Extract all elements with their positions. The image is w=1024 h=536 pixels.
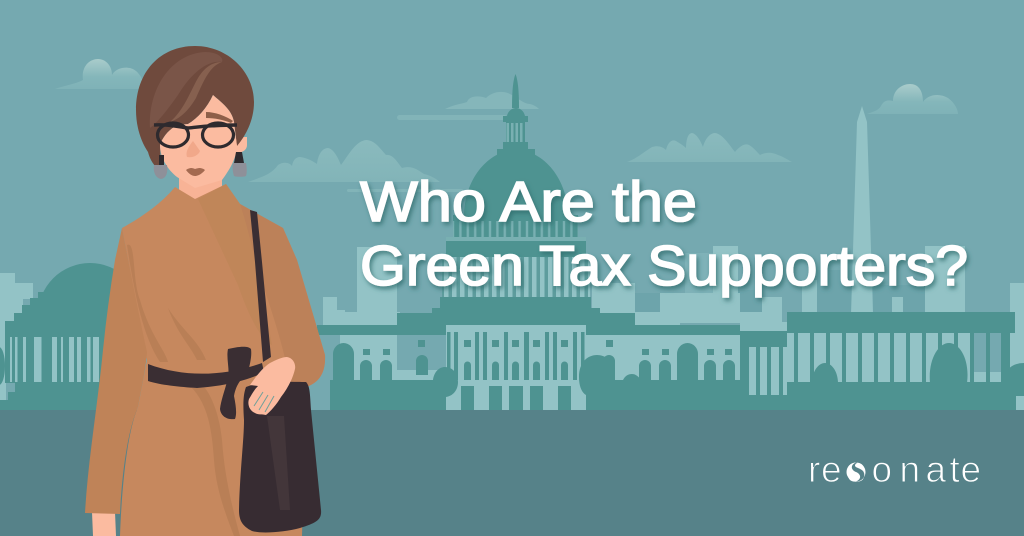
portico columns [447,332,584,380]
hair strand [170,62,222,122]
roof band [740,331,787,347]
eyebrow [206,112,233,123]
drum lower band [397,241,635,325]
title line two: Green Tax Supporters? [360,234,968,298]
podium [0,382,110,410]
nose [186,141,200,157]
glasses [154,123,237,147]
title line one: Who Are the [360,170,697,234]
drape fold [127,245,168,362]
shrub [0,347,5,385]
connecting colonnade [740,331,787,410]
base [787,382,1024,410]
stepped roof [5,292,108,338]
hair [136,46,254,172]
cloud: behind dome spire [445,92,539,109]
drum colonnade [453,215,578,237]
lantern [497,108,535,158]
washington monument [851,106,873,314]
colonnade [5,337,110,383]
cloud: top right [867,84,958,114]
us capitol [317,74,740,410]
handbag [239,382,321,532]
resonate logo [808,449,981,490]
faint block [685,253,713,295]
right ear [236,137,247,153]
left sleeve [85,228,147,514]
collar fold [198,184,272,345]
lips [186,168,205,176]
right shrubs and ground [579,355,740,410]
coat body [120,184,325,536]
left hand [92,512,116,536]
trees [812,343,1024,383]
bag strap shadow [267,416,290,510]
cloud: streak [347,189,463,192]
dome [464,150,568,216]
mid-tone blocks [635,270,925,315]
cloud: left of dome [248,140,440,182]
cloud: top left [55,59,145,89]
right hand [248,357,295,415]
columns [787,333,1010,383]
lincoln memorial [787,312,1024,410]
ground [0,410,1024,536]
dome base columns [442,257,590,297]
light backdrop [0,329,6,404]
portico windows [363,340,732,355]
cloud: right of dome [627,133,792,162]
belt knot and tail [220,347,251,419]
wing roof band [317,325,740,335]
hair highlight [150,52,222,128]
left shrubs and ground [330,367,458,410]
east wing body [340,335,740,410]
cloud: streak below spire [397,115,507,120]
recessed block [397,335,446,370]
woman figure [85,46,325,536]
skirt fold [192,388,240,536]
entablature [787,312,1015,333]
portico arches [360,355,735,380]
background city blocks [0,106,1024,403]
bag strap [250,210,271,362]
logo mark [846,462,866,482]
large wing arches [333,343,698,380]
jefferson memorial [0,263,142,410]
neck [179,165,222,202]
shaded columns [974,333,1001,378]
central portico [446,325,586,410]
portico doors [461,386,571,410]
wordmark: resonate [808,449,981,490]
column gaps [10,337,99,382]
coat folds [127,184,272,536]
waist fold [168,308,206,360]
belt [148,363,264,388]
spire [512,74,519,108]
light skyline blocks [0,246,1024,403]
drum gap [446,237,586,241]
title [360,170,968,298]
left earring [154,155,167,179]
right sleeve [240,204,325,387]
right earring [233,152,247,177]
columns [740,347,787,410]
corner step [1016,396,1024,410]
lantern columns [506,123,522,142]
face [160,95,237,188]
dome [38,263,142,367]
clouds [55,59,958,192]
